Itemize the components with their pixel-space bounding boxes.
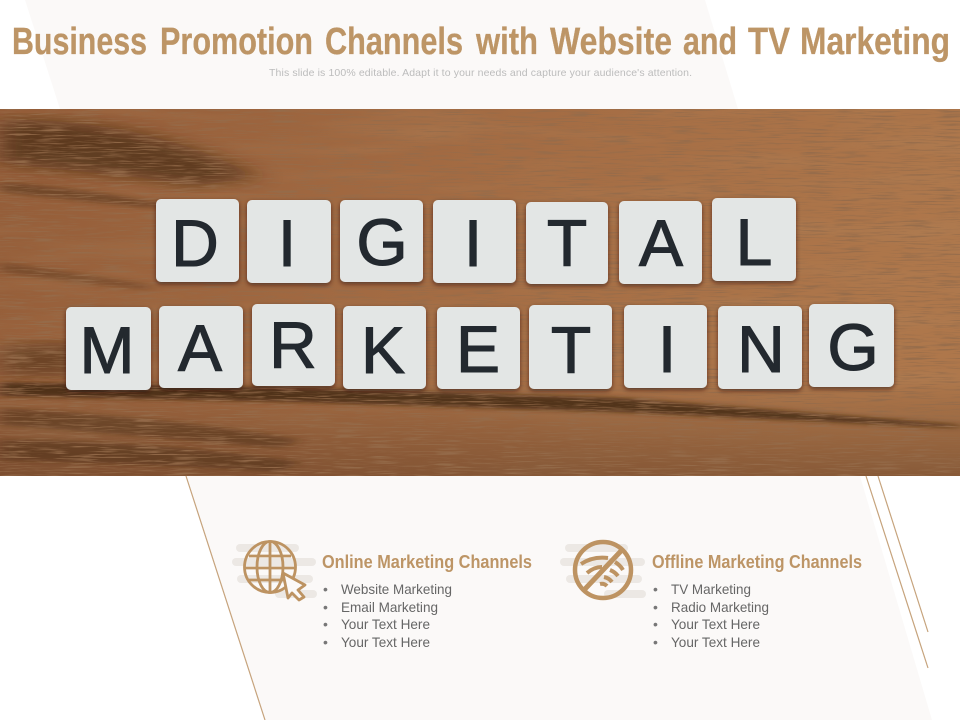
tile row: DIGITAL (156, 198, 796, 284)
tile row: DIGITAL: T (547, 206, 587, 280)
list: online channels: Your Text Here (341, 616, 430, 632)
list: offline channels: • (653, 581, 658, 597)
photo: digital marketing tiles on wood (0, 109, 960, 476)
title (12, 21, 950, 63)
icon: globe with cursor (232, 541, 317, 600)
title: Channels (325, 21, 463, 63)
bottom background panel (186, 476, 932, 720)
list: online channels: • (323, 581, 328, 597)
heading: offline marketing channels: Offline Marketing Channels (652, 552, 862, 572)
title: Business (12, 21, 147, 63)
top background panel (25, 0, 738, 109)
list: offline channels: Your Text Here (671, 634, 760, 650)
title: Promotion (160, 21, 313, 63)
list: online channels: Website Marketing (341, 581, 452, 597)
list: offline channels: • (653, 599, 658, 615)
tile row: MARKETING: I (658, 312, 676, 386)
tile row: MARKETING (66, 304, 894, 390)
tile row: DIGITAL: A (639, 206, 683, 280)
tile row: MARKETING: E (456, 312, 500, 386)
list: online channels: • (323, 634, 328, 650)
tile row: DIGITAL: I (464, 206, 482, 280)
list: online channels: Your Text Here (341, 634, 430, 650)
list: online channels (323, 581, 452, 650)
list: offline channels: TV Marketing (671, 581, 751, 597)
list: offline channels: • (653, 616, 658, 632)
list: offline channels: Radio Marketing (671, 599, 769, 615)
tile row: MARKETING: A (178, 311, 222, 385)
title: Website (550, 21, 672, 63)
accent line left (186, 476, 265, 720)
tile row: MARKETING: G (827, 310, 879, 384)
tile row: MARKETING: K (361, 313, 405, 387)
tile row: MARKETING: M (80, 313, 134, 387)
accent line right inner (878, 476, 928, 632)
tile row: MARKETING: R (269, 308, 317, 382)
list: online channels: • (323, 599, 328, 615)
subtitle: This slide is 100% editable. Adapt it to your needs and capture your audience's attention. (269, 67, 692, 79)
icon: no wifi (560, 542, 646, 598)
title: TV (748, 21, 791, 63)
wood dark bands (0, 120, 960, 472)
tile row: DIGITAL: G (356, 205, 408, 279)
tile row: DIGITAL: D (171, 206, 219, 280)
heading: online marketing channels: Online Marketing Channels (322, 552, 532, 572)
list: online channels: Email Marketing (341, 599, 438, 615)
title: with (475, 21, 538, 63)
list: offline channels: • (653, 634, 658, 650)
tile row: MARKETING: T (551, 313, 591, 387)
list: offline channels (653, 581, 769, 650)
title: and (683, 21, 737, 63)
tile row: DIGITAL: I (278, 206, 296, 280)
tile row: MARKETING: N (737, 312, 785, 386)
list: online channels: • (323, 616, 328, 632)
list: offline channels: Your Text Here (671, 616, 760, 632)
tile row: DIGITAL: L (736, 205, 772, 279)
accent line right outer (866, 476, 928, 668)
